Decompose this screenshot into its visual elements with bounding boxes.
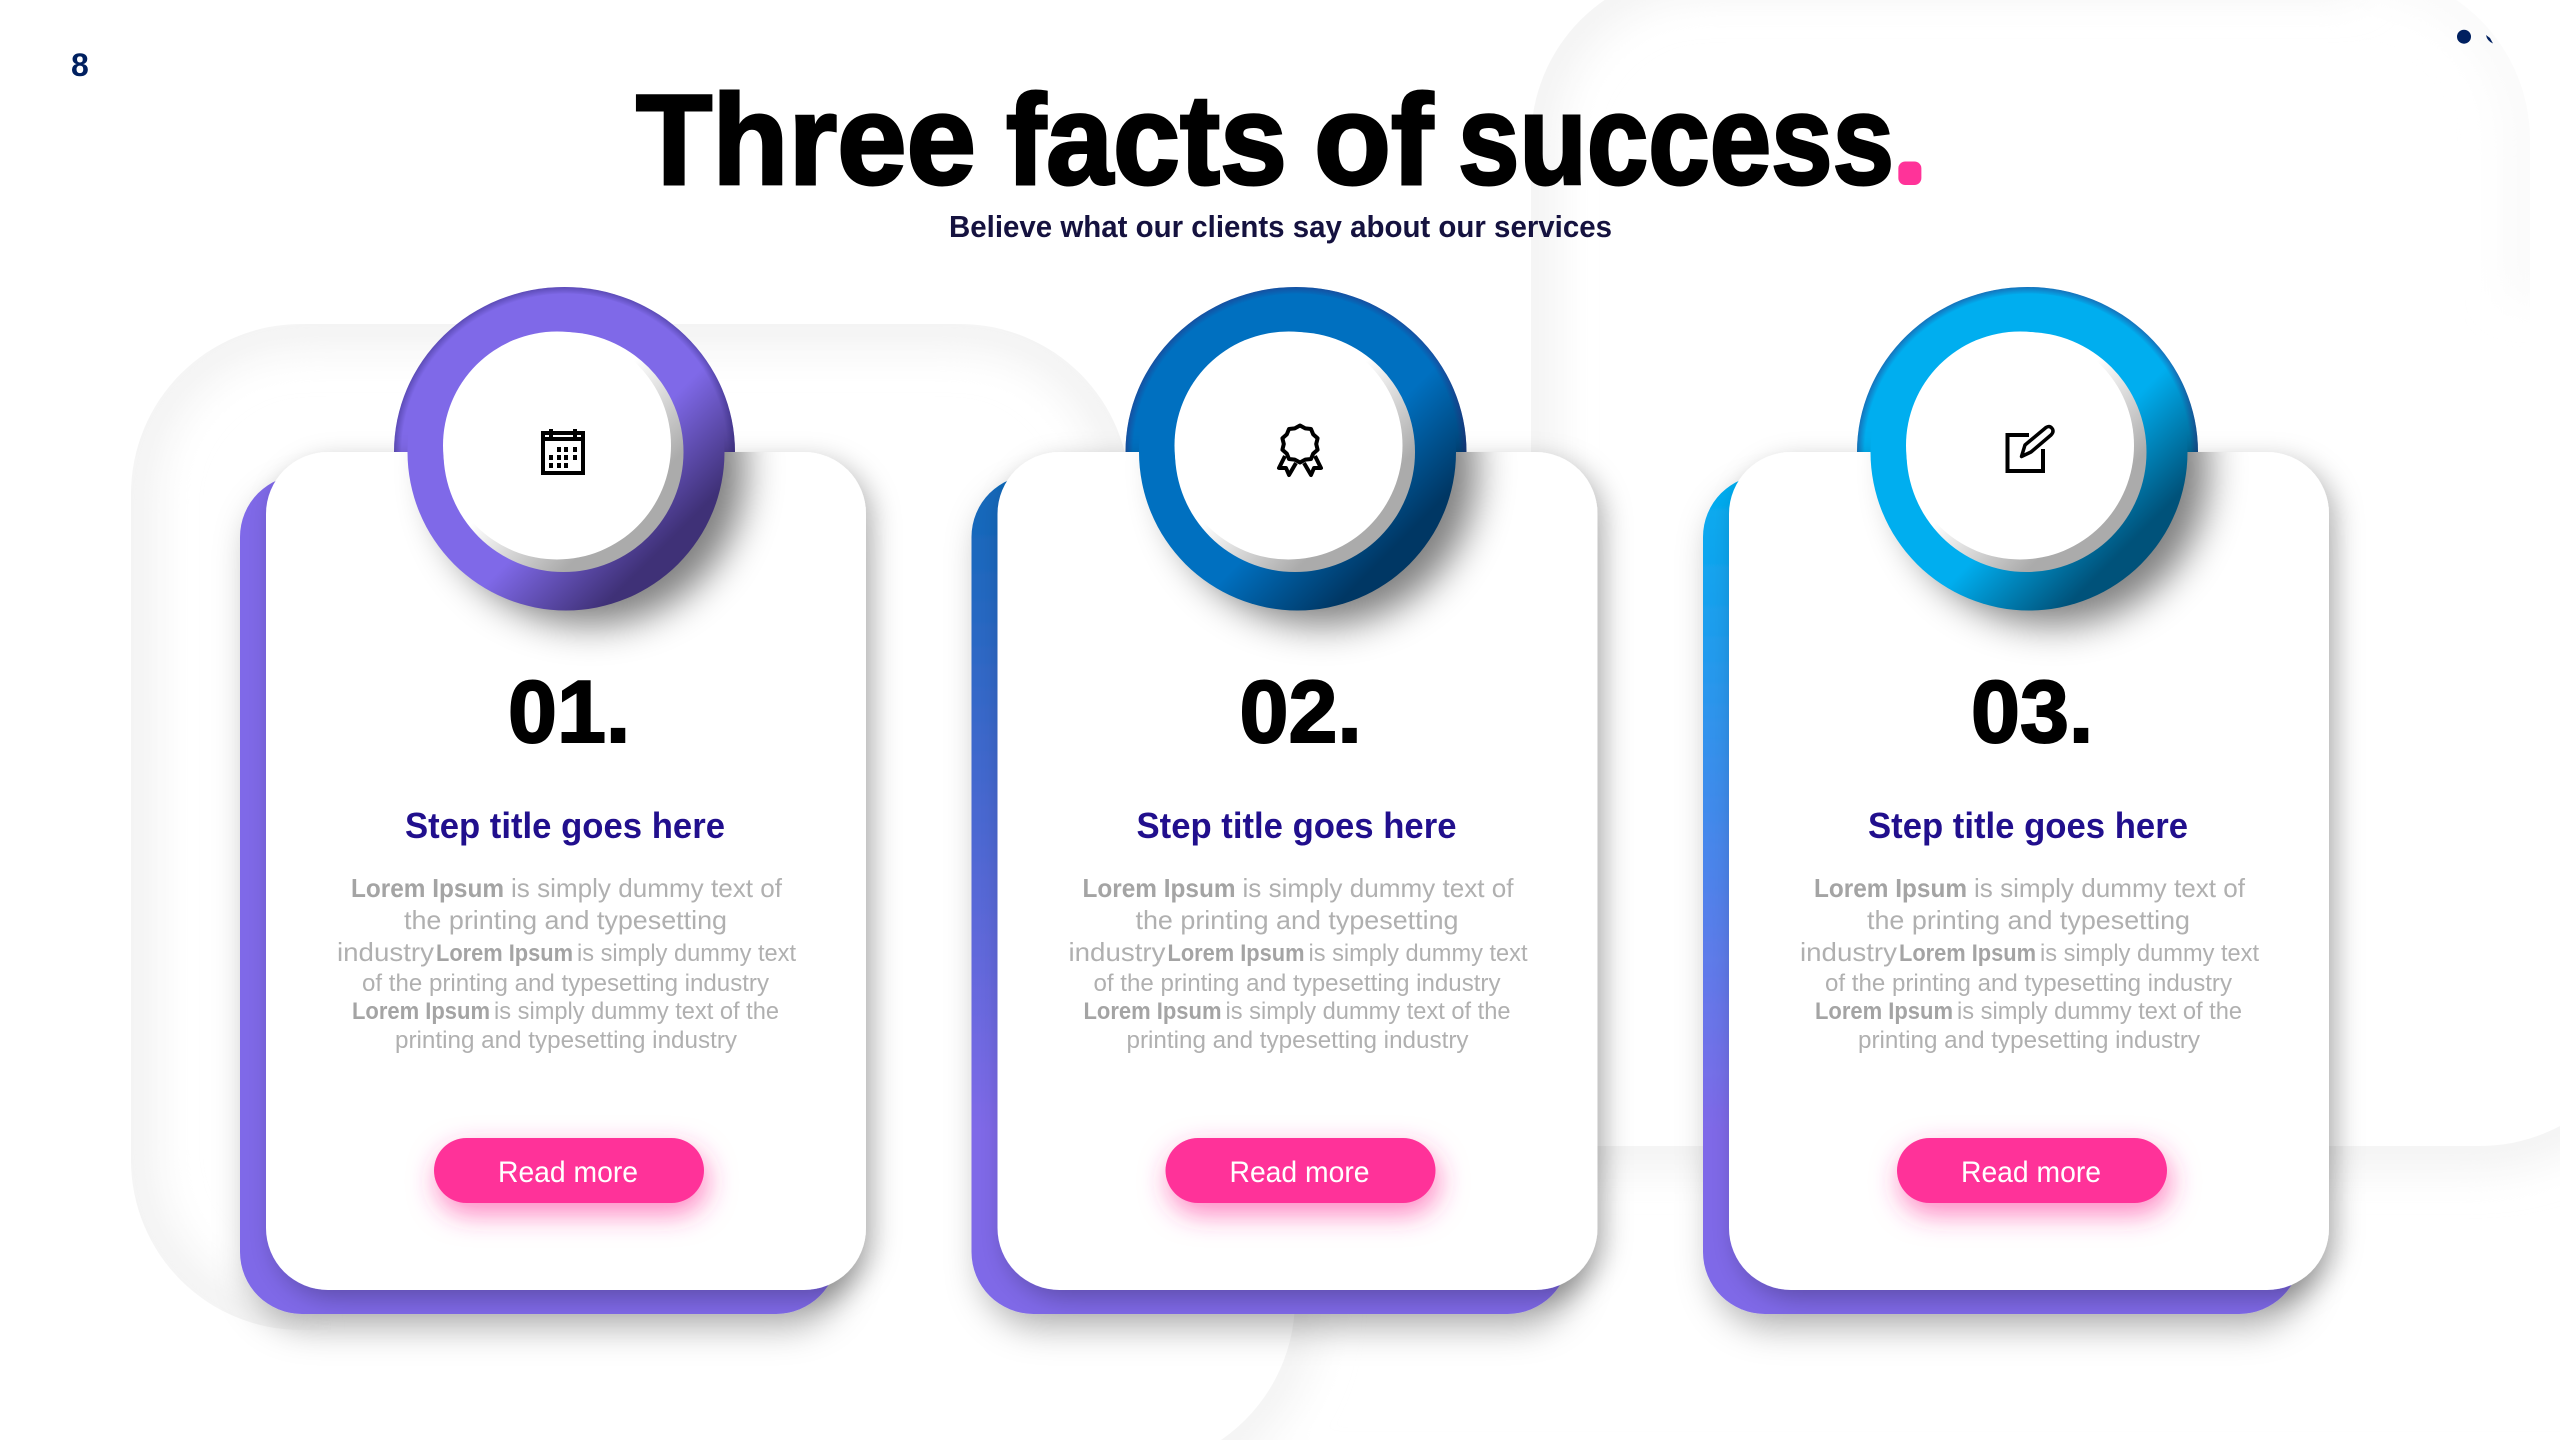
card 2 body text	[1068, 873, 1528, 1054]
card 1 ring cap	[394, 287, 735, 617]
icon: calendar	[543, 429, 583, 473]
card 1 body text: is simply dummy text of the	[494, 998, 779, 1025]
card 3 disc	[1906, 332, 2146, 572]
card 3 body text: Lorem Ipsum	[1814, 873, 1967, 903]
card 2 body text: industry	[1068, 937, 1166, 967]
icon: note and pencil	[2008, 427, 2053, 471]
card 1 body text: Lorem Ipsum	[351, 873, 504, 903]
card 1 body text: printing and typesetting industry	[395, 1027, 737, 1054]
panel: card 3	[1703, 287, 2329, 1314]
card 1 body text: of the printing and typesetting industry	[362, 970, 769, 997]
card 2 number: 02.	[1240, 662, 1362, 761]
card 3 step title: Step title goes here	[1868, 805, 2188, 846]
card 3 body text: is simply dummy text	[2040, 940, 2259, 967]
card 2 ring shadow	[1141, 452, 1502, 651]
card 1 white panel	[266, 452, 866, 1290]
icon: award ribbon	[1279, 426, 1321, 475]
subtitle: Believe what our clients say about our services	[949, 209, 1612, 244]
title	[636, 69, 1919, 212]
card 2 body text: the printing and typesetting	[1136, 905, 1458, 935]
card 2 backing	[972, 475, 1570, 1314]
card 3 number: 03.	[1971, 662, 2093, 761]
card 2 body text: printing and typesetting industry	[1126, 1027, 1468, 1054]
panel: card 1	[240, 287, 866, 1314]
title: Three	[636, 69, 976, 212]
page number: 8	[71, 47, 89, 83]
card 3 ring shadow	[1872, 452, 2234, 651]
card 2 body text: Lorem Ipsum	[1084, 998, 1222, 1025]
card 1 body text: the printing and typesetting	[404, 905, 727, 935]
card 3 body text: of the printing and typesetting industry	[1825, 970, 2232, 997]
card 2 white panel	[998, 452, 1598, 1290]
card 1 button: Read more	[498, 1156, 638, 1189]
card 1 ring shadow	[410, 452, 771, 651]
card 3 backing	[1703, 475, 2301, 1314]
background shape: right rounded square	[1531, 0, 1638, 452]
card 3 ring	[1870, 294, 2188, 610]
card 2 body text: Lorem Ipsum	[1168, 940, 1304, 967]
card 3 button: Read more	[1961, 1156, 2101, 1189]
card 2 ring cap	[1126, 287, 1466, 617]
card 1 body text: industry	[337, 937, 434, 967]
card 3 body text: Lorem Ipsum	[1815, 998, 1953, 1025]
card 3 body text: is simply dummy text of the	[1957, 998, 2242, 1025]
title: of	[1314, 69, 1433, 212]
card 2 body text: is simply dummy text of the	[1226, 998, 1510, 1025]
card 3 body text: printing and typesetting industry	[1858, 1027, 2200, 1054]
card 2 disc	[1174, 332, 1415, 572]
card 2 button: Read more	[1230, 1156, 1370, 1189]
card 1 body text: Lorem Ipsum	[352, 998, 490, 1025]
card 2 body text: is simply dummy text	[1308, 940, 1528, 967]
card 3 button	[1897, 1138, 2167, 1203]
background shape: lower right band	[1222, 1126, 2560, 1440]
card 3 body text: the printing and typesetting	[1867, 905, 2190, 935]
card 1 button	[434, 1138, 704, 1203]
card 2 button	[1166, 1138, 1436, 1203]
card 3 ring cap	[1857, 287, 2198, 617]
card 3 body text	[1800, 873, 2259, 1054]
panel: card 2	[972, 287, 1598, 1314]
card 1 body text: is simply dummy text of	[511, 873, 783, 903]
title: .	[1901, 120, 1919, 192]
card 3 body text: is simply dummy text of	[1974, 873, 2246, 903]
card 2 body text: of the printing and typesetting industry	[1094, 970, 1500, 997]
card 1 backing	[240, 475, 838, 1314]
card 1 ring	[408, 294, 724, 610]
decorative dots	[2457, 30, 2493, 44]
card 2 ring	[1139, 294, 1456, 610]
card 1 number: 01.	[508, 662, 630, 761]
card 2 body text: Lorem Ipsum	[1082, 873, 1236, 903]
title: facts	[1006, 69, 1287, 212]
card 2 body text: is simply dummy text of	[1242, 873, 1514, 903]
card 1 body text: is simply dummy text	[577, 940, 796, 967]
card 1 body text: Lorem Ipsum	[436, 940, 573, 967]
background shape: left rounded square	[131, 324, 1130, 1330]
card 1 body text	[337, 873, 796, 1054]
card 2 step title: Step title goes here	[1136, 805, 1456, 846]
card 3 body text: Lorem Ipsum	[1899, 940, 2036, 967]
card 3 white panel	[1729, 452, 2329, 1290]
card 1 disc	[443, 332, 684, 572]
card 3 body text: industry	[1800, 937, 1897, 967]
title: success	[1458, 69, 1894, 212]
card 1 step title: Step title goes here	[405, 805, 725, 846]
